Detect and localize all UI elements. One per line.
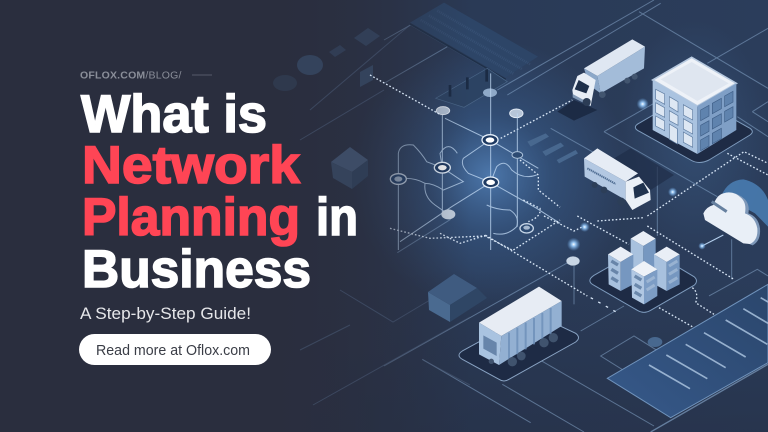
faint machines top xyxy=(273,28,380,91)
building windows xyxy=(656,89,693,147)
pallets xyxy=(527,133,578,163)
call to action button: Read more at Oflox.com xyxy=(96,342,250,359)
subtitle: A Step-by-Step Guide! xyxy=(80,305,251,323)
network nodes xyxy=(390,107,533,233)
title xyxy=(81,85,358,299)
warehouse roof xyxy=(410,3,538,79)
faint grid lines xyxy=(300,25,470,405)
isometric illustration: lower right xyxy=(384,216,768,432)
faded left overlay xyxy=(0,0,470,432)
dotted routes xyxy=(501,100,768,216)
upper nodes xyxy=(483,88,523,118)
lower nodes and sparks xyxy=(566,222,590,266)
road and grid lines upper xyxy=(384,0,768,216)
eyebrow: blog path: OFLOX.COM/BLOG/ xyxy=(80,70,182,82)
title: in xyxy=(316,188,358,247)
container xyxy=(479,287,562,366)
road lines lower xyxy=(384,216,768,432)
faint cube xyxy=(331,147,368,189)
truck two xyxy=(584,148,674,210)
dotted feed line xyxy=(370,75,441,115)
building xyxy=(653,57,736,154)
server towers xyxy=(608,231,680,304)
pad at bottom right xyxy=(607,284,768,432)
loading dock posts xyxy=(436,68,507,107)
server platform xyxy=(590,248,696,312)
container platform xyxy=(459,314,578,381)
network lines xyxy=(398,73,560,250)
building platform xyxy=(635,95,752,162)
small sensor xyxy=(648,337,662,347)
network dotted routes xyxy=(390,160,560,251)
dotted routes lower xyxy=(486,216,734,327)
title: Network xyxy=(82,136,301,195)
small sparks xyxy=(637,98,677,197)
warehouse box xyxy=(428,274,487,322)
title: Business xyxy=(82,240,311,299)
isometric illustration: upper right xyxy=(384,0,768,216)
title: Planning xyxy=(82,188,300,247)
network diagram xyxy=(390,73,560,251)
truck one xyxy=(557,39,645,121)
faint left-side illustration xyxy=(273,25,487,405)
call to action button xyxy=(79,334,271,365)
cloud xyxy=(698,179,768,250)
title: What is xyxy=(81,85,267,144)
